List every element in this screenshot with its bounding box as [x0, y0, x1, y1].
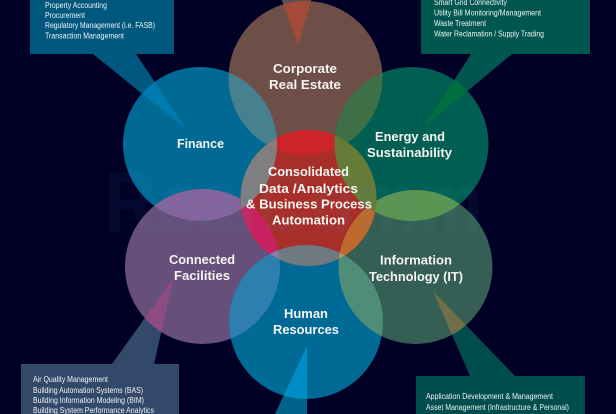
label: consolidated data: Consolidated — [268, 165, 349, 179]
circle: corporate real estate — [228, 1, 382, 155]
circle: energy and sustainability — [334, 67, 488, 221]
overlap: finance and connected — [154, 189, 242, 221]
callout: energy and sustainability — [421, 0, 590, 127]
label: corporate real estate: Real Estate — [269, 78, 341, 92]
label: finance: Finance — [177, 137, 224, 151]
central overlap: corporate — [266, 130, 348, 155]
overlap: corporate and energy — [335, 72, 382, 142]
central triple overlap: IT and human resources — [339, 252, 344, 259]
label: human resources: Human — [284, 307, 328, 321]
pointer overlap: corporate — [283, 1, 311, 45]
callout: finance: Transaction Management — [45, 32, 125, 40]
circle: connected facilities — [125, 189, 280, 344]
overlap: connected and human resources — [229, 254, 280, 338]
callout: finance: Regulatory Management (i.e. FASB) — [45, 21, 155, 30]
label: consolidated data: & Business Process — [246, 198, 372, 212]
circle: information technology — [338, 190, 492, 344]
circle: finance — [123, 67, 277, 221]
label: connected facilities: Connected — [169, 253, 235, 267]
label: consolidated data — [246, 165, 372, 228]
label: information technology: Technology (IT) — [369, 270, 463, 284]
label: connected facilities: Facilities — [174, 269, 230, 283]
label: human resources — [273, 307, 339, 337]
overlap: IT and human resources — [338, 256, 383, 336]
label: information technology — [369, 254, 463, 284]
central overlap: human resources — [278, 245, 340, 266]
callout: connected facilities: Building Automation Systems (BAS) — [33, 386, 143, 395]
central overlap: energy — [334, 136, 376, 212]
label: energy and sustainability: Sustainability — [367, 146, 452, 160]
overlap: finance and corporate — [228, 72, 277, 144]
label: energy and sustainability — [367, 130, 452, 160]
central triple overlap: connected and human resources — [270, 250, 280, 260]
overlap: energy and IT — [375, 190, 460, 221]
callout: energy and sustainability: Waste Treatment — [434, 19, 487, 28]
callout: energy and sustainability: Utility Bill Monitoring/Management — [434, 8, 542, 18]
central overlap: finance — [240, 138, 277, 209]
callout: connected facilities: Air Quality Management — [33, 375, 109, 384]
callout: finance — [30, 0, 187, 130]
callout pointer: corporate real estate — [281, 0, 312, 45]
central overlap: connected — [240, 200, 280, 260]
callout: connected facilities — [21, 278, 179, 414]
label: consolidated data: Automation — [272, 214, 345, 228]
pointer overlap: finance — [142, 82, 186, 130]
callout: information technology — [416, 291, 585, 414]
label: consolidated data: Data /Analytics — [259, 182, 358, 196]
central circle: consolidated data — [240, 130, 376, 266]
callout: finance: Procurement — [45, 11, 86, 20]
pointer overlap: connected — [145, 278, 174, 332]
label: corporate real estate: Corporate — [273, 62, 337, 76]
pointer overlap: IT — [433, 291, 466, 335]
callout pointer: human resources — [274, 346, 307, 414]
callout: finance: Property Accounting — [45, 1, 107, 10]
label: human resources: Resources — [273, 323, 339, 337]
label: energy and sustainability: Energy and — [375, 130, 445, 144]
watermark: RealComm — [105, 155, 483, 251]
label: information technology: Information — [380, 254, 452, 268]
callout: information technology: Asset Management (Infrastructure & Personal) — [426, 403, 569, 412]
central overlap: IT — [339, 201, 376, 259]
callout: information technology: Application Development & Management — [426, 392, 554, 401]
label: connected facilities — [169, 253, 235, 283]
label: corporate real estate — [269, 62, 341, 92]
callout: connected facilities: Building Information Modeling (BIM) — [33, 396, 144, 405]
callout: energy and sustainability: Water Reclamation / Supply Trading — [434, 30, 544, 38]
pointer overlap: energy — [424, 80, 467, 126]
pointer overlap: human resources — [284, 346, 307, 399]
circle: human resources — [229, 245, 383, 399]
